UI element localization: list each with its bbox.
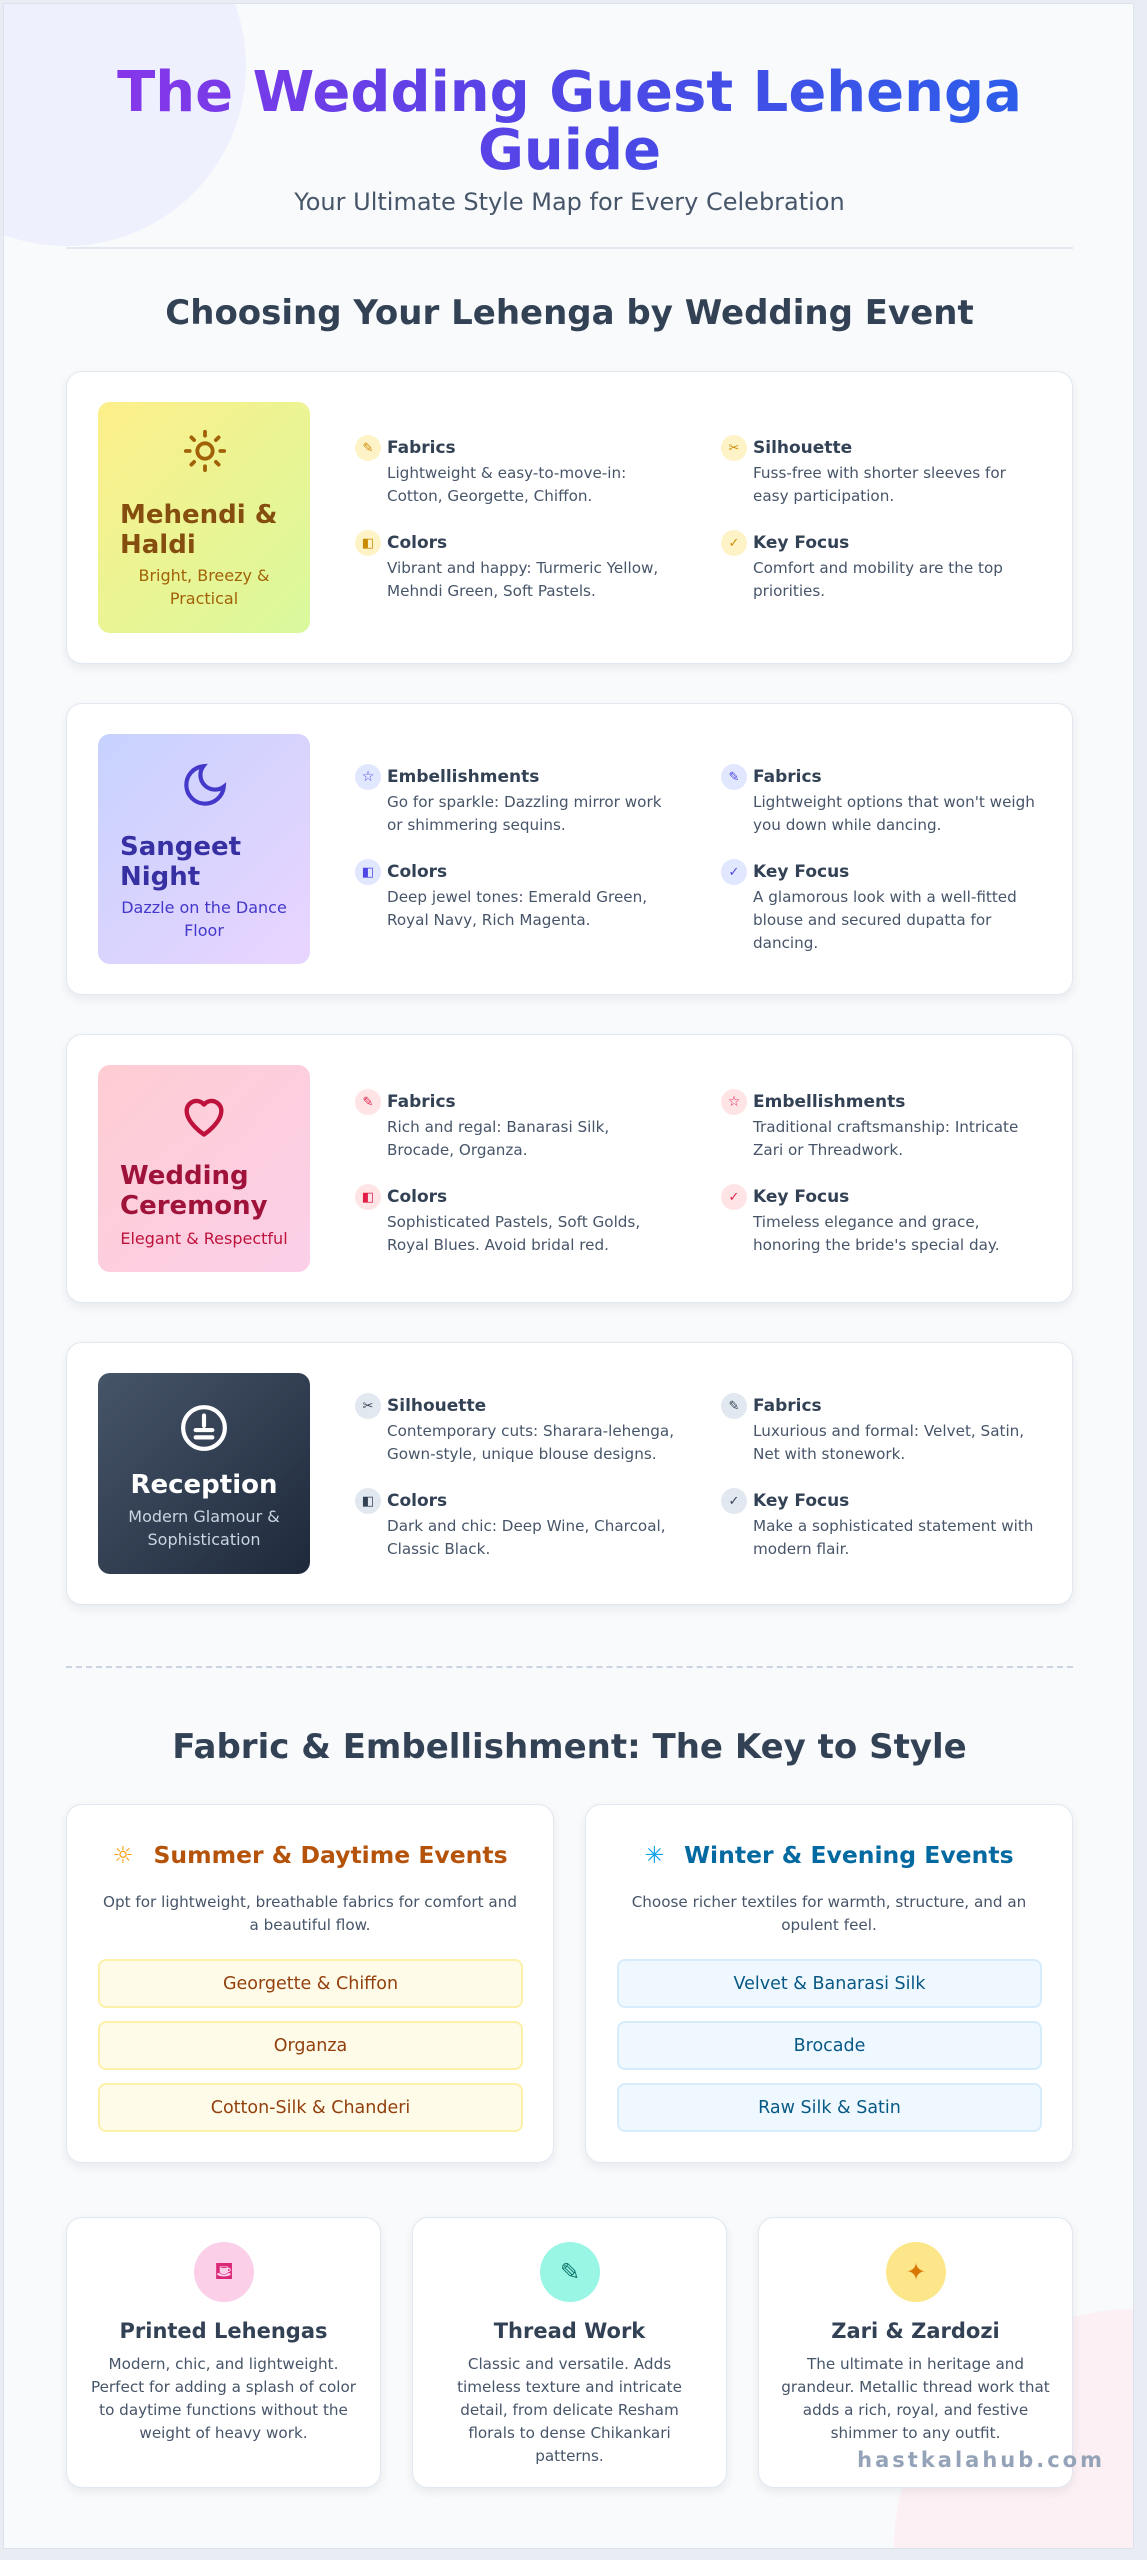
tile: wedding: Ceremony xyxy=(120,1191,268,1221)
item: silhouette: Silhouette xyxy=(387,1396,486,1416)
item: key focus: A glamorous look with a well-fitted xyxy=(753,888,1017,906)
panel: Wedding Ceremony: ✎ xyxy=(363,1094,373,1110)
heading: winter: ✳ Winter & Evening Events xyxy=(644,1841,1014,1869)
item: colors xyxy=(355,530,658,600)
item: fabrics: Fabrics xyxy=(753,1396,822,1416)
item: embellishments xyxy=(721,1089,1018,1159)
panel: thread: Thread Work xyxy=(494,2319,645,2343)
item: fabrics: Cotton, Georgette, Chiffon. xyxy=(387,487,592,505)
panel: thread: detail, from delicate Resham xyxy=(460,2401,679,2419)
icon: sun xyxy=(184,430,226,472)
pill xyxy=(98,2083,523,2132)
panel: summer xyxy=(66,1804,554,2163)
panel: thread: timeless texture and intricate xyxy=(457,2378,682,2396)
text: winter desc: Choose richer textiles for warmth, structure, and an xyxy=(632,1893,1026,1911)
tile: mehendi: Bright, Breezy & xyxy=(138,566,270,585)
item: key focus: honoring the bride's special day. xyxy=(753,1236,1000,1254)
item: fabrics: Brocade, Organza. xyxy=(387,1141,528,1159)
panel: zari: shimmer to any outfit. xyxy=(831,2424,1000,2442)
item: embellishments: Traditional craftsmanship: Intricate xyxy=(753,1118,1018,1136)
panel: Reception: ✎ xyxy=(729,1398,739,1414)
icon: thread xyxy=(540,2242,600,2302)
item: fabrics: Lightweight options that won't weigh xyxy=(753,793,1035,811)
panel: winter xyxy=(585,1804,1073,2163)
item: colors: Sophisticated Pastels, Soft Golds, xyxy=(387,1213,640,1231)
item: key focus xyxy=(721,1488,1033,1558)
panel: Wedding Ceremony xyxy=(66,1034,1073,1303)
item: fabrics: Fabrics xyxy=(387,1092,456,1112)
item: fabrics xyxy=(721,1393,1024,1463)
icon: moon xyxy=(184,764,226,806)
item: fabrics: Lightweight & easy-to-move-in: xyxy=(387,464,626,482)
item: colors xyxy=(355,859,647,929)
pill: Cotton-Silk & Chanderi xyxy=(211,2098,410,2118)
panel: Mehendi & Haldi: ✎ xyxy=(363,440,373,456)
heading: fabric: Fabric & Embellishment: The Key to Style xyxy=(172,1727,967,1767)
panel: Reception: ✓ xyxy=(729,1494,739,1508)
item: embellishments: Embellishments xyxy=(753,1092,905,1112)
tile: reception: Reception xyxy=(130,1470,278,1500)
panel: Mehendi & Haldi xyxy=(66,371,1073,664)
item: key focus: Key Focus xyxy=(753,533,849,553)
text: summer desc: Opt for lightweight, breathable fabrics for comfort and xyxy=(103,1893,517,1911)
item: colors xyxy=(355,1184,640,1254)
panel: zari xyxy=(758,2217,1073,2488)
item: fabrics: you down while dancing. xyxy=(753,816,941,834)
tile: wedding: Elegant & Respectful xyxy=(120,1229,288,1248)
item: colors: Colors xyxy=(387,1491,447,1511)
icon: heart xyxy=(184,1098,224,1137)
panel: thread xyxy=(412,2217,727,2488)
panel: Reception xyxy=(66,1342,1073,1605)
panel: thread: Classic and versatile. Adds xyxy=(468,2355,671,2373)
pill xyxy=(98,1959,523,2008)
item: embellishments: Go for sparkle: Dazzling mirror work xyxy=(387,793,662,811)
icon: thread: ✎ xyxy=(560,2258,580,2286)
item: key focus: Timeless elegance and grace, xyxy=(753,1213,980,1231)
tile: reception xyxy=(98,1373,310,1574)
item: embellishments: Zari or Threadwork. xyxy=(753,1141,903,1159)
item: key focus xyxy=(721,530,1003,600)
tile: wedding: Wedding xyxy=(120,1161,249,1191)
tile: sangeet: Sangeet xyxy=(120,832,241,862)
panel: thread: florals to dense Chikankari xyxy=(468,2424,671,2442)
item: colors: Royal Navy, Rich Magenta. xyxy=(387,911,590,929)
item: silhouette xyxy=(721,435,1006,505)
pill: Velvet & Banarasi Silk xyxy=(734,1974,925,1994)
tile: mehendi: Haldi xyxy=(120,530,196,560)
item: silhouette: Silhouette xyxy=(753,438,852,458)
item: silhouette: Gown-style, unique blouse designs. xyxy=(387,1445,657,1463)
item: silhouette: easy participation. xyxy=(753,487,894,505)
pill xyxy=(617,2083,1042,2132)
tile: mehendi: Practical xyxy=(170,589,238,608)
item: fabrics: Rich and regal: Banarasi Silk, xyxy=(387,1118,609,1136)
title xyxy=(4,64,1135,180)
panel: printed: Printed Lehengas xyxy=(120,2319,328,2343)
item: colors: Royal Blues. Avoid bridal red. xyxy=(387,1236,609,1254)
item: colors: Deep jewel tones: Emerald Green, xyxy=(387,888,647,906)
panel: zari: The ultimate in heritage and xyxy=(807,2355,1024,2373)
icon: printed xyxy=(194,2242,254,2302)
item: key focus: dancing. xyxy=(753,934,818,952)
item: silhouette xyxy=(355,1393,674,1463)
panel: printed: weight of heavy work. xyxy=(139,2424,308,2442)
item: silhouette: Fuss-free with shorter sleeves for xyxy=(753,464,1006,482)
icon: sparkles: ✦ xyxy=(906,2258,926,2286)
panel: printed: Modern, chic, and lightweight. xyxy=(109,2355,338,2373)
pill xyxy=(617,2021,1042,2070)
title: The Wedding Guest Lehenga xyxy=(117,60,1022,125)
panel: Mehendi & Haldi: ◧ xyxy=(362,536,374,550)
tile: wedding xyxy=(98,1065,310,1272)
tile: sangeet: Night xyxy=(120,862,200,892)
item: colors: Colors xyxy=(387,1187,447,1207)
pill xyxy=(98,2021,523,2070)
panel: Sangeet Night xyxy=(66,703,1073,995)
title: Guide xyxy=(478,118,661,183)
item: fabrics: Luxurious and formal: Velvet, Satin, xyxy=(753,1422,1024,1440)
tile: reception: Modern Glamour & xyxy=(128,1507,280,1526)
panel: Reception: ◧ xyxy=(362,1494,374,1508)
item: embellishments: Embellishments xyxy=(387,767,539,787)
text: winter desc xyxy=(632,1893,1026,1934)
item: key focus: blouse and secured dupatta for xyxy=(753,911,991,929)
panel: Sangeet Night: ✓ xyxy=(729,864,739,880)
pill: Organza xyxy=(274,2036,347,2056)
tile: mehendi: Mehendi & xyxy=(120,500,277,530)
pill: Brocade xyxy=(794,2036,865,2056)
item: embellishments: or shimmering sequins. xyxy=(387,816,566,834)
panel: zari: adds a rich, royal, and festive xyxy=(803,2401,1028,2419)
item: fabrics xyxy=(721,764,1035,834)
text: winter desc: opulent feel. xyxy=(781,1916,877,1934)
pill: Georgette & Chiffon xyxy=(223,1974,398,1994)
panel: zari: Zari & Zardozi xyxy=(831,2319,1000,2343)
tile: reception: Sophistication xyxy=(148,1530,260,1549)
pill xyxy=(617,1959,1042,2008)
icon: printed: ⛾ xyxy=(214,2256,234,2284)
item: key focus: modern flair. xyxy=(753,1540,849,1558)
tile: sangeet xyxy=(98,734,310,964)
panel: Mehendi & Haldi: ✂ xyxy=(729,440,739,456)
item: key focus xyxy=(721,859,1017,952)
item: colors: Vibrant and happy: Turmeric Yellow, Mehndi Green, Soft Pastels. xyxy=(387,559,658,600)
panel: printed: to daytime functions without the xyxy=(99,2401,348,2419)
item: key focus: Key Focus xyxy=(753,1187,849,1207)
item: key focus: Make a sophisticated statement with xyxy=(753,1517,1033,1535)
panel: Sangeet Night: ☆ xyxy=(362,769,374,785)
item: silhouette: Contemporary cuts: Sharara-lehenga, xyxy=(387,1422,674,1440)
item: colors: Classic Black. xyxy=(387,1540,490,1558)
panel: Wedding Ceremony: ✓ xyxy=(729,1190,739,1204)
panel: Sangeet Night: ✎ xyxy=(729,770,739,784)
item: colors: Dark and chic: Deep Wine, Charcoal, xyxy=(387,1517,666,1535)
panel: Wedding Ceremony: ☆ xyxy=(728,1094,740,1110)
item: fabrics: Net with stonework. xyxy=(753,1445,905,1463)
panel: Sangeet Night: ◧ xyxy=(362,864,374,880)
tile: sangeet: Dazzle on the Dance xyxy=(121,898,287,917)
watermark: hastkalahub.com xyxy=(857,2448,1105,2472)
icon: reception xyxy=(181,1405,227,1451)
tile: sangeet: Floor xyxy=(184,921,224,940)
text: summer desc: a beautiful flow. xyxy=(250,1916,370,1934)
pill: Raw Silk & Satin xyxy=(758,2098,901,2118)
heading: summer: ☼ Summer & Daytime Events xyxy=(112,1841,508,1869)
panel: printed xyxy=(66,2217,381,2488)
panel: printed: Perfect for adding a splash of color xyxy=(91,2378,356,2396)
item: key focus: Key Focus xyxy=(753,862,849,882)
panel: Reception: ✂ xyxy=(363,1398,373,1414)
heading: events: Choosing Your Lehenga by Wedding Event xyxy=(165,293,974,333)
item: colors: Colors xyxy=(387,862,447,882)
item: colors: Colors xyxy=(387,533,447,553)
panel: Wedding Ceremony: ◧ xyxy=(362,1190,374,1204)
item: colors xyxy=(355,1488,666,1558)
item: embellishments xyxy=(355,764,662,834)
tile: mehendi xyxy=(98,402,310,633)
item: key focus xyxy=(721,1184,1000,1254)
item: key focus: Key Focus xyxy=(753,1491,849,1511)
panel: thread: patterns. xyxy=(535,2447,604,2465)
panel: zari: grandeur. Metallic thread work that xyxy=(781,2378,1050,2396)
subtitle: Your Ultimate Style Map for Every Celebration xyxy=(294,188,845,216)
item: fabrics: Fabrics xyxy=(753,767,822,787)
item: fabrics xyxy=(355,435,626,505)
item: key focus: Comfort and mobility are the top priorities. xyxy=(753,559,1003,600)
panel: Mehendi & Haldi: ✓ xyxy=(729,536,739,550)
item: fabrics: Fabrics xyxy=(387,438,456,458)
text: summer desc xyxy=(103,1893,517,1934)
item: fabrics xyxy=(355,1089,609,1159)
icon: sparkles xyxy=(886,2242,946,2302)
